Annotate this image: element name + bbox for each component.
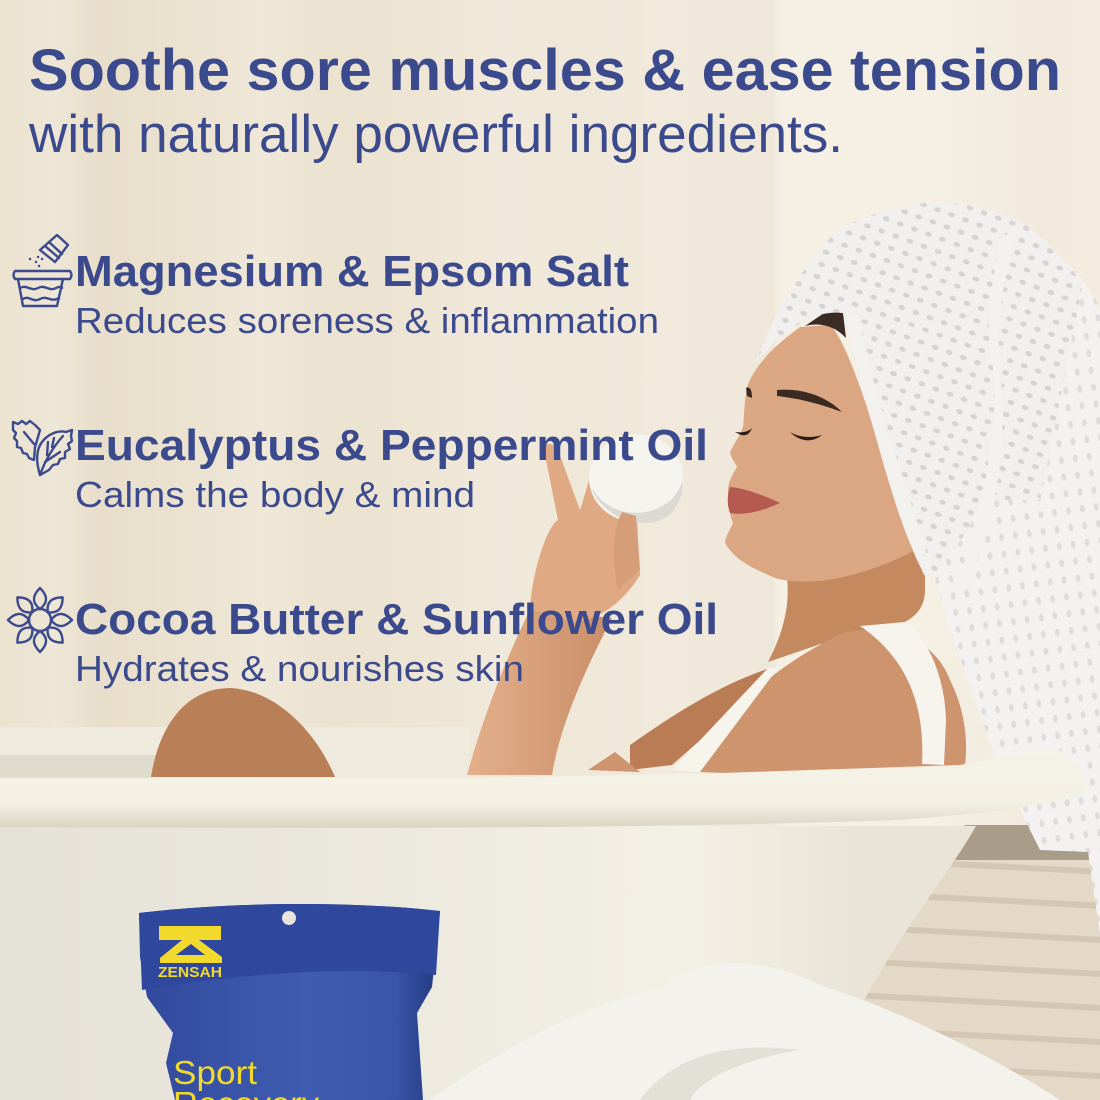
woman: face	[725, 311, 925, 582]
towel on tub edge	[430, 963, 1060, 1100]
tub back wall	[0, 727, 470, 782]
item: eucalyptus and peppermint oil: Eucalyptus & Peppermint Oil	[75, 421, 708, 470]
tub rim	[0, 747, 1085, 828]
icon: salt bowl	[14, 235, 72, 306]
item: cocoa butter and sunflower oil	[8, 588, 718, 689]
item: magnesium and epsom salt	[14, 235, 659, 341]
woman: neck	[768, 540, 925, 662]
woman: body and arm	[467, 610, 966, 776]
item: cocoa butter and sunflower oil: Hydrates & nourishes skin	[75, 648, 524, 689]
title	[28, 38, 1061, 164]
logo: Zensah	[158, 926, 222, 981]
woman: waffle towel turban	[755, 203, 1083, 600]
pouch text: Sport	[173, 1054, 257, 1091]
item: magnesium and epsom salt: Reduces soreness & inflammation	[75, 300, 659, 341]
product pouch	[139, 904, 440, 1100]
item: eucalyptus and peppermint oil: Calms the body & mind	[75, 474, 475, 515]
woman: knee	[151, 688, 335, 777]
item: magnesium and epsom salt: Magnesium & Epsom Salt	[75, 247, 629, 296]
item: eucalyptus and peppermint oil	[13, 421, 708, 515]
logo: Zensah: ZENSAH	[158, 964, 222, 981]
tub body	[0, 826, 976, 1100]
icon: sunflower	[8, 588, 72, 652]
title: Soothe sore muscles & ease tension	[29, 38, 1061, 103]
subtitle: with naturally powerful ingredients.	[28, 105, 843, 164]
hanging towel behind shoulder	[930, 240, 1100, 935]
woman: hand holding bath bomb	[530, 434, 683, 622]
icon: leaves	[13, 421, 72, 475]
floor decking	[800, 825, 1100, 1100]
item: cocoa butter and sunflower oil: Cocoa Butter & Sunflower Oil	[75, 595, 718, 644]
